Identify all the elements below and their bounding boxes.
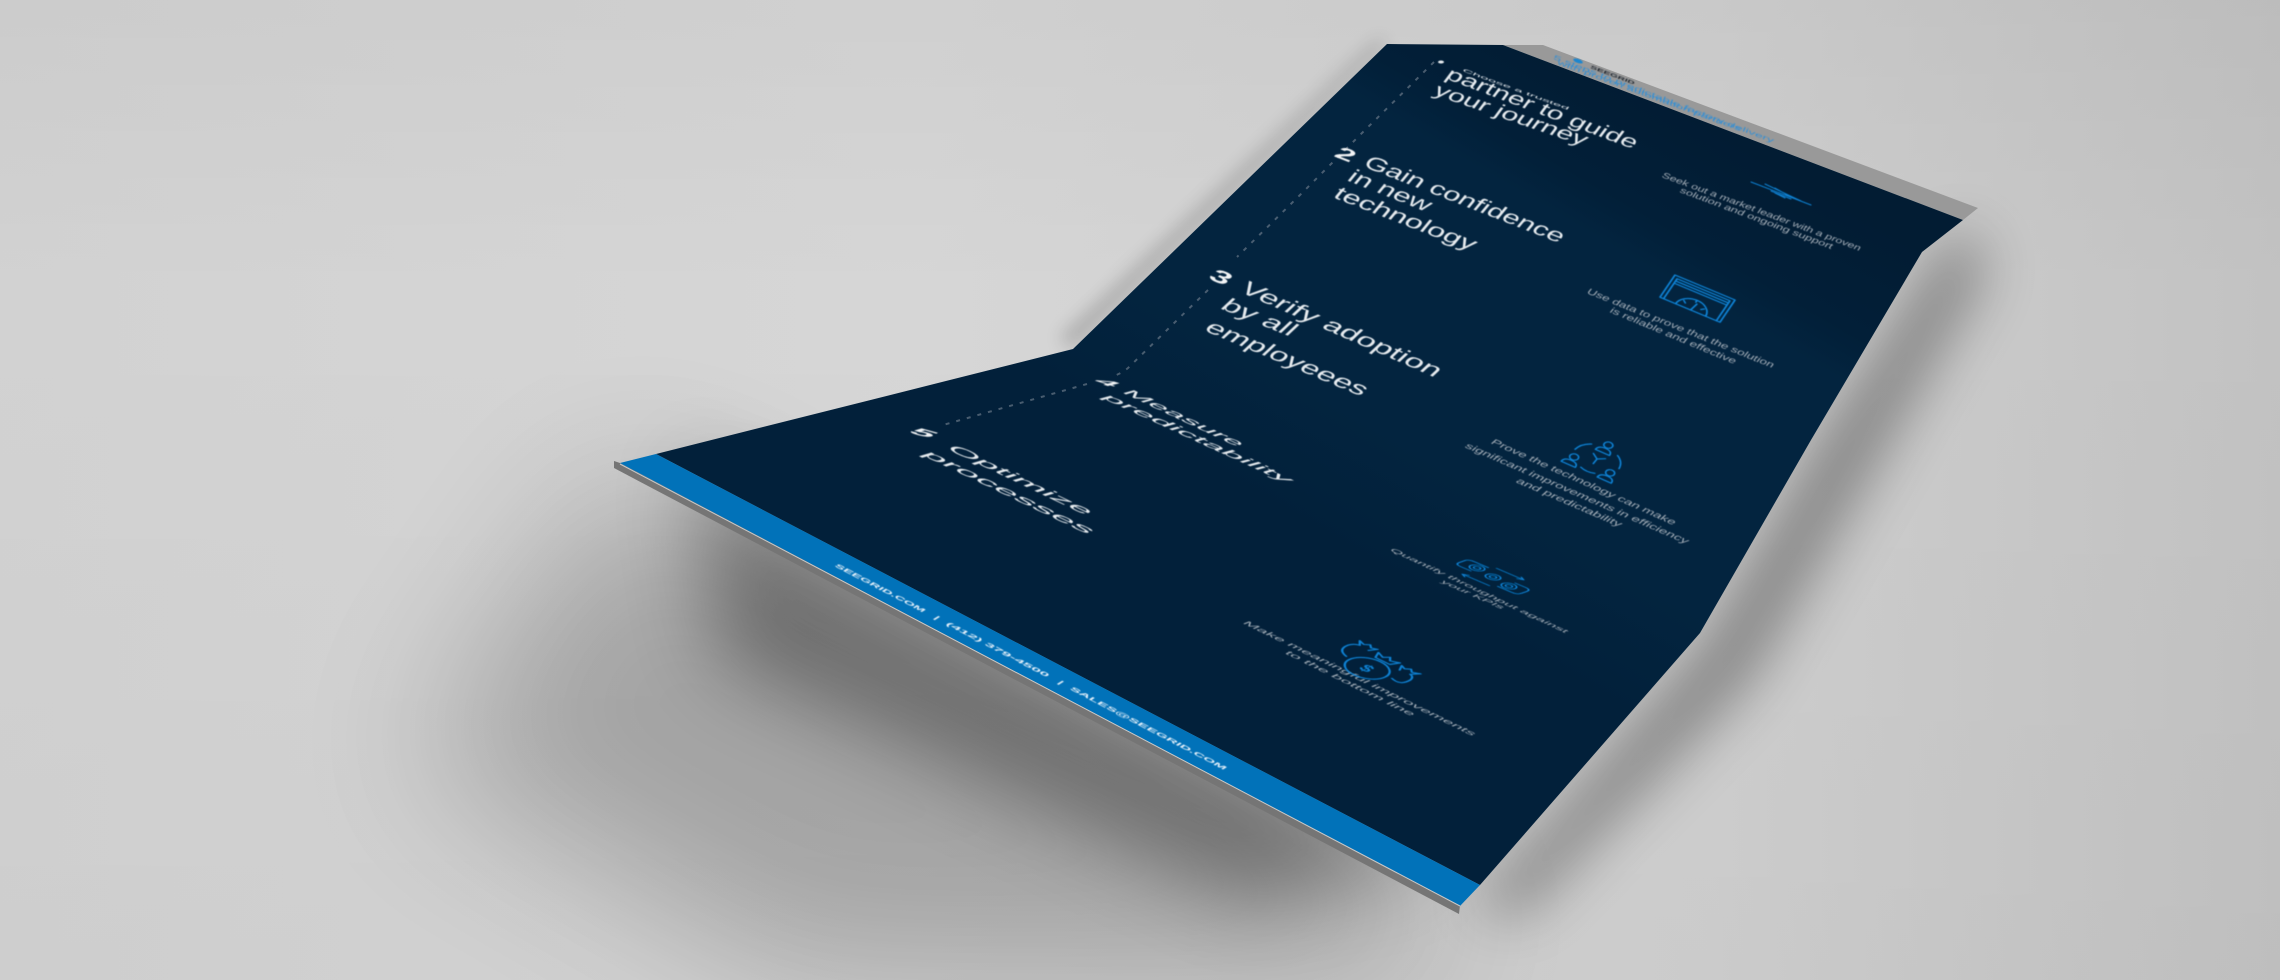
step 3 heading: Verify adoption (1235, 277, 1449, 381)
footer blue band (620, 454, 1480, 906)
step 2 heading: 2 (1330, 143, 1361, 166)
step 3 description: significant improvements in efficiency (1462, 441, 1692, 546)
step 3 heading (1200, 266, 1449, 400)
step 4 description: Quantify throughput against (1387, 547, 1572, 634)
step 1 heading: your journey (1429, 81, 1593, 150)
flap logo: SEEGRID (1590, 65, 1636, 86)
step 2 heading: Gain confidence (1359, 152, 1570, 247)
dotted timeline (943, 62, 1434, 425)
step 2 heading: technology (1329, 182, 1484, 255)
flap blue tagline: with proven automation partners (1555, 59, 1742, 133)
main dark panel (656, 44, 1963, 885)
cast shadow of brochure (420, 40, 1985, 975)
footer contact text: SALES@SEEGRID.COM (1068, 686, 1229, 771)
footer contact text: (412) 379-4500 (944, 621, 1051, 678)
step 5 heading: 5 (903, 426, 944, 439)
step 4 description: your KPIs (1438, 579, 1507, 610)
footer contact text: | (932, 615, 941, 621)
flap blue tagline: 5 steps to predictable factory delivery (1552, 54, 1776, 145)
step 3 heading: by all (1216, 295, 1304, 340)
paper edge (614, 461, 1460, 914)
step 3 description: Prove the technology can make (1488, 437, 1680, 527)
step 4 heading: Measure (1117, 388, 1251, 448)
step 4 heading: 4 (1088, 378, 1126, 388)
flap logo (1573, 57, 1636, 86)
step 2 heading: in new (1343, 166, 1438, 216)
icon: gauge (1660, 275, 1735, 322)
footer contact text: | (1056, 680, 1065, 686)
footer contact text: SEEGRID.COM (832, 563, 927, 613)
icon: coins and arrows (1444, 557, 1542, 597)
icon: money bags: $ (1354, 663, 1379, 675)
step 2 description: Use data to prove that the solution (1584, 287, 1777, 370)
step 1 heading: partner to guide (1441, 64, 1643, 153)
step 5 description: to the bottom line (1282, 650, 1419, 717)
step 3 heading: employeees (1200, 316, 1376, 400)
step 1 description: solution and ongoing support (1678, 186, 1835, 251)
icon: money bags (1320, 640, 1427, 691)
back flap (1503, 45, 1978, 220)
step 5 heading: processes (916, 450, 1102, 535)
step 5 heading: Optimize (941, 443, 1101, 516)
icon: team cycle (1561, 432, 1636, 483)
step 3 description: and predictability (1513, 476, 1626, 529)
icon: handshake (foreshortened) (1751, 182, 1811, 205)
brochure (614, 44, 1978, 914)
step 1 description: Seek out a market leader with a proven (1660, 172, 1863, 253)
footer contact text (832, 563, 1229, 771)
step 1 heading: Choose a trusted (1461, 68, 1570, 111)
step 3 heading: 3 (1203, 266, 1238, 289)
step 4 heading: predictability (1096, 393, 1300, 484)
step 2 description: is reliable and effective (1607, 306, 1739, 366)
step 5 description: Make meaningful improvements (1240, 620, 1479, 737)
